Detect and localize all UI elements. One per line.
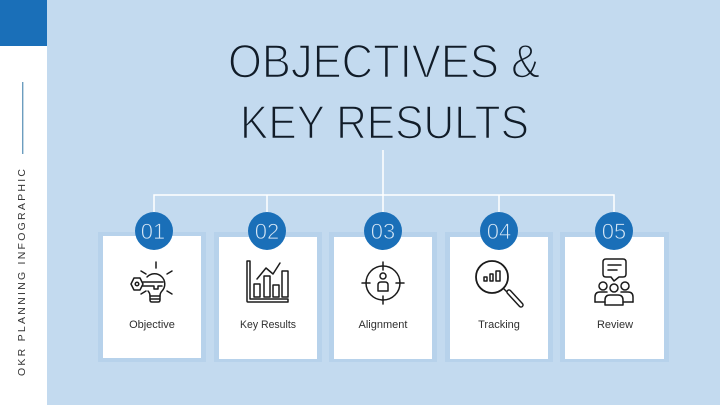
number badge 04 bbox=[480, 212, 518, 250]
panel: review bbox=[560, 212, 669, 362]
number badge 05: 05 bbox=[602, 219, 626, 244]
panel: objective bbox=[98, 212, 206, 362]
number badge 01 bbox=[135, 212, 173, 250]
icon: target with person bbox=[362, 262, 404, 304]
sidebar blue corner block bbox=[0, 0, 47, 46]
label: alignment: Alignment bbox=[359, 319, 407, 331]
panel: tracking bbox=[445, 212, 553, 362]
number badge 02 bbox=[248, 212, 286, 250]
number badge 02: 02 bbox=[255, 219, 279, 244]
title: OBJECTIVES & bbox=[228, 34, 540, 88]
panel: alignment bbox=[329, 212, 437, 362]
title: KEY RESULTS bbox=[240, 96, 529, 148]
number badge 03: 03 bbox=[371, 219, 395, 244]
icon: key and light bulb bbox=[131, 262, 172, 302]
title bbox=[228, 34, 540, 148]
number badge 03 bbox=[364, 212, 402, 250]
panel: key results bbox=[214, 212, 322, 362]
number badge 04: 04 bbox=[487, 219, 511, 244]
connector lines bbox=[154, 150, 614, 214]
label: review: Review bbox=[597, 319, 633, 331]
sidebar vertical label: OKR PLANNING INFOGRAPHIC bbox=[16, 169, 28, 376]
label: tracking: Tracking bbox=[478, 319, 520, 331]
sidebar accent line bbox=[22, 82, 23, 154]
sidebar bbox=[0, 0, 47, 405]
icon: speech bubble over team bbox=[595, 259, 633, 305]
number badge 05 bbox=[595, 212, 633, 250]
number badge 01: 01 bbox=[141, 219, 165, 244]
label: key results: Key Results bbox=[240, 319, 296, 331]
icon: magnifier with bars bbox=[476, 261, 521, 305]
icon: bar chart with trend line bbox=[247, 261, 288, 302]
label: objective: Objective bbox=[129, 319, 175, 331]
